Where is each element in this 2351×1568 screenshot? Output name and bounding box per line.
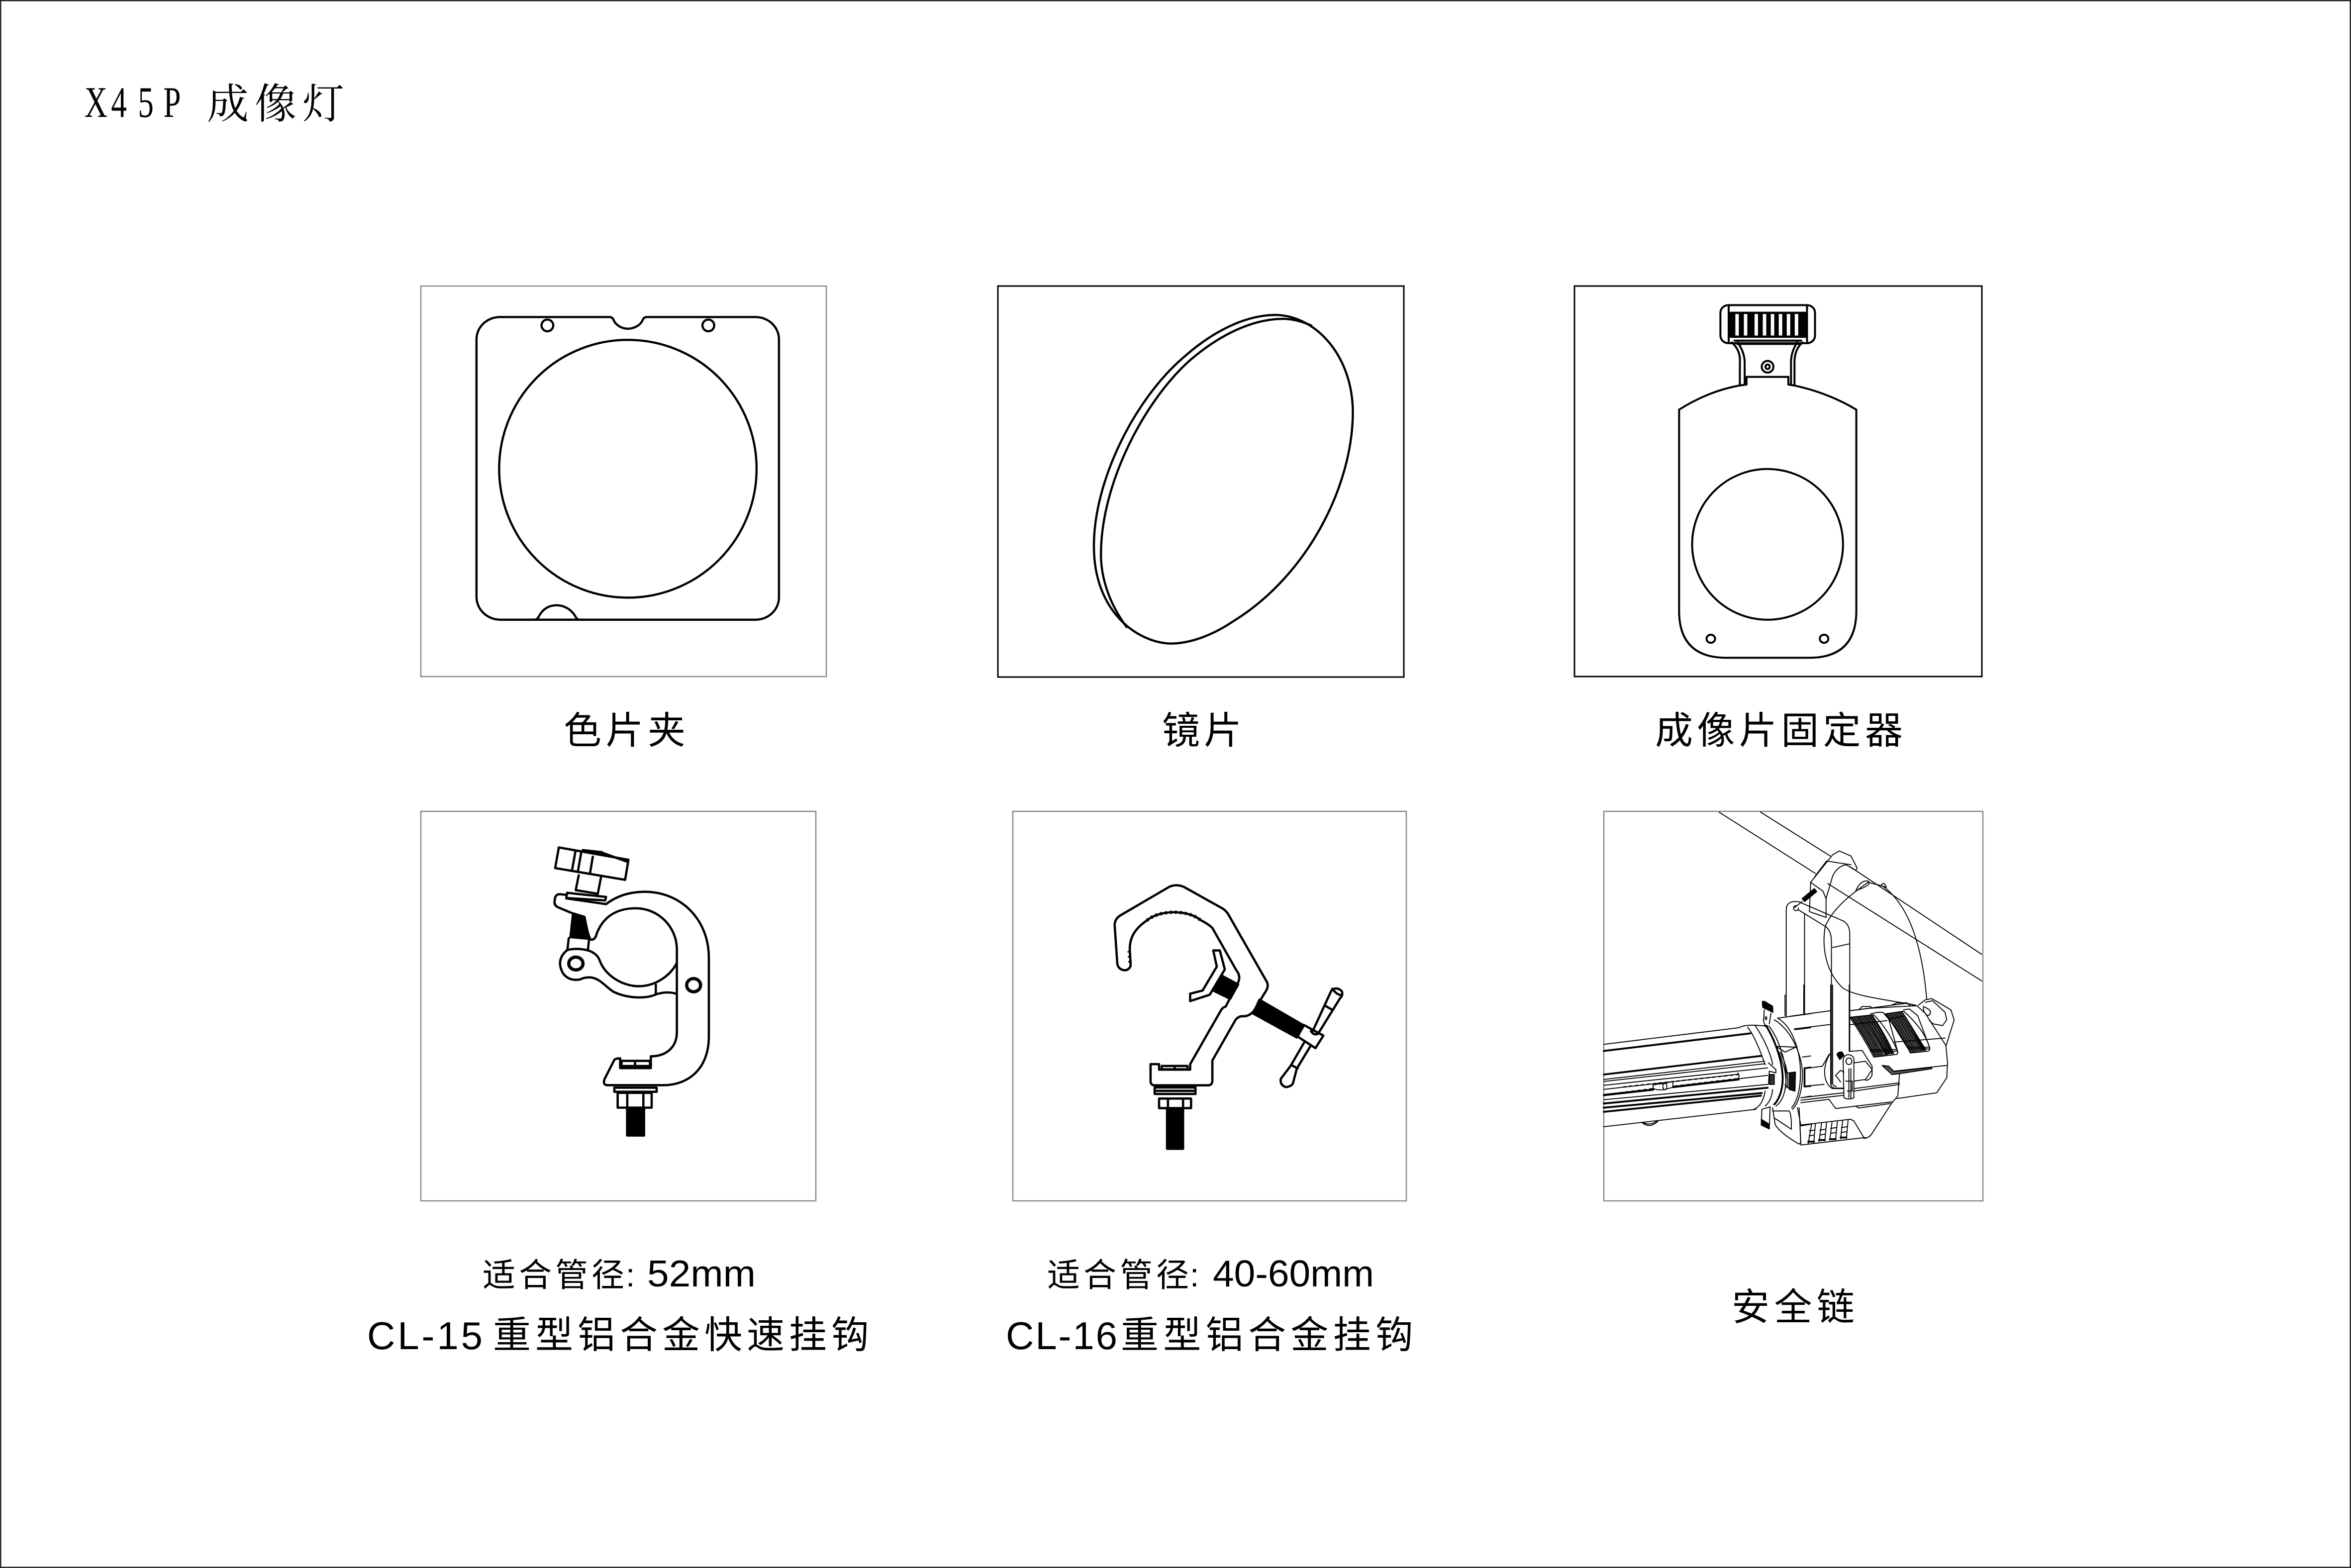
icon: colour frame holder bbox=[477, 317, 779, 620]
icon: gobo holder bbox=[1679, 305, 1857, 658]
label: CL-16 pipe size bbox=[1047, 1253, 1374, 1294]
icon: lens bbox=[1094, 315, 1353, 644]
lamp body, fins and handle bbox=[1791, 985, 1954, 1145]
pipe and clamp bbox=[1719, 812, 1982, 1084]
panel: safety chain bbox=[1604, 811, 1983, 1201]
label: CL-16 name: 重型铝合金挂钩 bbox=[1121, 1314, 1413, 1357]
icon: CL-15 clamp bbox=[555, 848, 709, 1136]
label: CL-15 pipe size bbox=[483, 1253, 756, 1294]
panel: CL-15 clamp bbox=[421, 811, 816, 1201]
panel: colour frame bbox=[421, 286, 826, 677]
label: colour frame: 色片夹 bbox=[564, 710, 686, 752]
title bbox=[85, 71, 344, 131]
label: gobo holder: 成像片固定器 bbox=[1655, 710, 1903, 752]
label: CL-15 pipe size: : bbox=[626, 1257, 635, 1293]
label: CL-16 pipe size: 40-60mm bbox=[1213, 1253, 1374, 1294]
panel: gobo holder bbox=[1574, 286, 1982, 677]
label: CL-15 name: CL-15 bbox=[367, 1314, 483, 1358]
label: CL-16 pipe size: : bbox=[1190, 1257, 1199, 1293]
icon: luminaire with safety chain bbox=[1604, 812, 1982, 1145]
lens tube and front bbox=[1604, 995, 1811, 1144]
label: lens: 镜片 bbox=[1162, 710, 1242, 752]
label: CL-15 pipe size: 适合管径 bbox=[483, 1257, 624, 1293]
label: CL-15 pipe size: 52mm bbox=[647, 1253, 756, 1294]
title: X45P bbox=[85, 78, 181, 127]
panel: CL-16 clamp bbox=[1013, 811, 1406, 1201]
label: CL-16 name bbox=[1006, 1314, 1413, 1358]
label: CL-16 name: CL-16 bbox=[1006, 1314, 1117, 1358]
label: CL-16 pipe size: 适合管径 bbox=[1047, 1257, 1189, 1293]
label: CL-15 name: 重型铝合金快速挂钩 bbox=[493, 1314, 869, 1357]
icon: CL-16 clamp bbox=[1115, 885, 1342, 1149]
panel: lens bbox=[998, 286, 1404, 677]
label: safety chain: 安全链 bbox=[1732, 1286, 1855, 1329]
title: 成像灯 bbox=[207, 71, 344, 131]
